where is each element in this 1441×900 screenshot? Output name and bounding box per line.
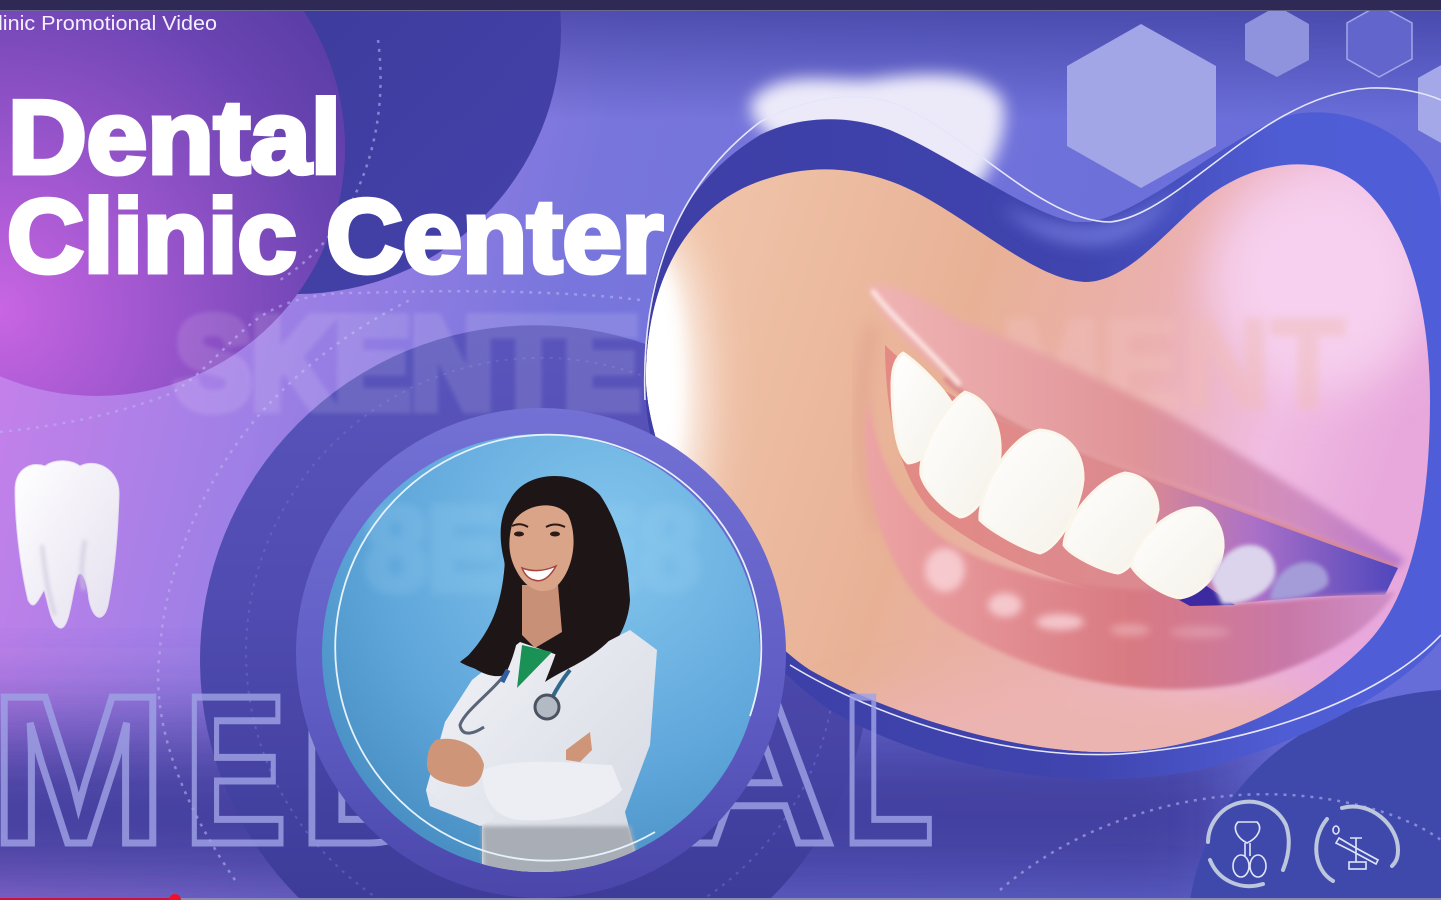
video top bar	[0, 0, 1441, 11]
wave outline	[645, 88, 1441, 755]
eyebrows	[512, 524, 565, 527]
hair right falling over coat	[545, 527, 629, 682]
coat lower	[480, 824, 638, 872]
video progress bar	[0, 894, 1441, 900]
video title text: linic Promotional Video	[0, 13, 217, 35]
neck	[522, 585, 562, 648]
title	[7, 80, 663, 295]
hexagons	[1067, 5, 1441, 188]
back teeth	[1211, 545, 1328, 604]
mouth interior	[885, 345, 1398, 606]
ghost text in portrait: 8E8E8	[365, 482, 700, 616]
right hand	[566, 732, 592, 762]
lower shading	[0, 730, 1250, 900]
upper right pink tone	[1210, 170, 1430, 390]
ghost text: right: MENT	[1000, 293, 1345, 436]
blurred tooth in background	[751, 74, 1004, 190]
ghost outline text: MEDICAL: D	[298, 651, 448, 888]
decorative dashed ring	[246, 358, 836, 900]
panel: doctor portrait circle	[322, 434, 761, 882]
forearm	[482, 762, 622, 820]
ghost outline text: MEDICAL: E	[184, 651, 287, 888]
soft highlight on the wave dip	[1000, 190, 1175, 245]
icon: dental forceps badge	[1208, 802, 1289, 886]
doctor figure	[366, 476, 657, 872]
hair left falling strand over coat	[467, 564, 516, 676]
cheek highlight 2	[646, 265, 688, 451]
upper lip	[868, 285, 1405, 570]
lower skin tone	[854, 674, 1318, 752]
panel: lower right dark blob	[1190, 690, 1441, 900]
ghost outline text: MEDICAL: L	[842, 651, 934, 888]
photo: smiling mouth	[646, 164, 1430, 752]
corner crease	[856, 332, 874, 482]
upper lip corner highlight	[872, 290, 960, 385]
eyes	[514, 532, 560, 536]
lower sleeve	[426, 790, 482, 826]
stethoscope chest piece	[535, 695, 559, 719]
portrait inner ring	[335, 435, 761, 861]
panel: dark ring around doctor	[200, 325, 870, 900]
ghost outline text: MEDICAL	[0, 651, 934, 888]
lower lip	[865, 400, 1395, 689]
upper lip edge	[945, 378, 1395, 568]
panel: doctor outer ring	[296, 408, 786, 898]
smile	[522, 566, 556, 581]
panel: purple top-left blob	[0, 0, 345, 396]
dark gap between teeth	[1178, 586, 1235, 606]
teeth	[892, 353, 1223, 598]
stethoscope	[460, 670, 570, 733]
icon: dental chair badge	[1316, 806, 1398, 881]
shirt	[517, 645, 552, 688]
cheek highlight	[646, 230, 730, 488]
title: Clinic Center	[7, 179, 663, 295]
icon: 3D tooth	[15, 461, 119, 628]
panel: dark top-left blob	[33, 0, 561, 294]
ghost outline text: MEDICAL: I	[450, 651, 500, 888]
hair back	[460, 476, 630, 682]
title: Dental	[8, 80, 341, 196]
ghost text: left: SKENTE	[175, 290, 640, 436]
lip gloss highlights	[925, 548, 1230, 638]
top shading	[0, 0, 1441, 120]
coat	[426, 630, 657, 880]
left hand	[427, 739, 484, 787]
ghost outline text: MEDICAL: A	[678, 651, 835, 888]
ghost outline text: MEDICAL: C	[510, 651, 660, 888]
face	[509, 505, 574, 591]
panel: mouth backing wave	[645, 112, 1441, 779]
